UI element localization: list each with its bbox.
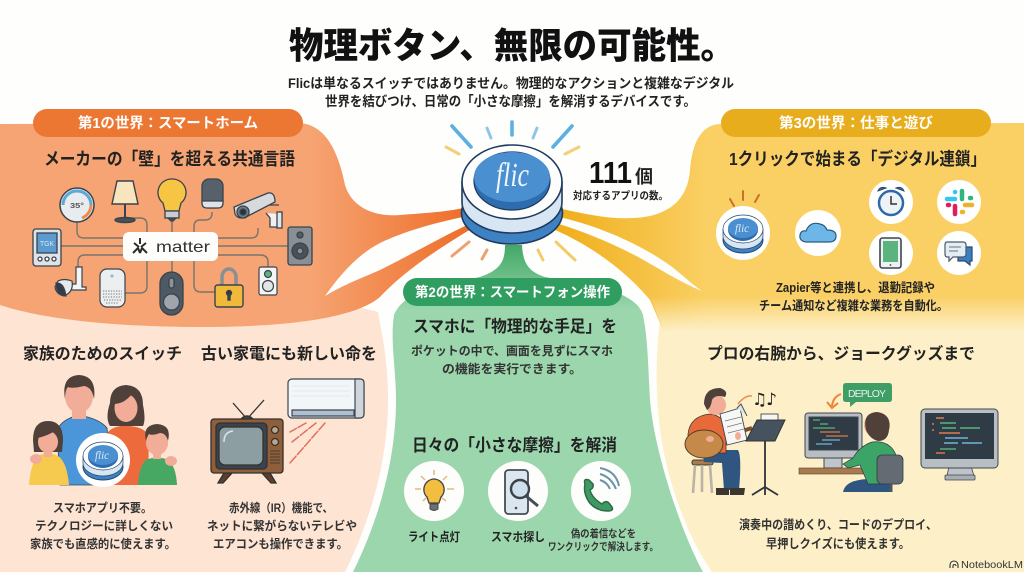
text: infrared <box>207 500 357 551</box>
mother's hand on boy <box>165 456 177 466</box>
stat: 111 apps: 111 <box>589 155 632 190</box>
text: family switch: スマホアプリ不要。 <box>53 501 152 515</box>
heading: physical limbs: スマホに「物理的な手足」を <box>413 316 617 336</box>
text: fake call: 偽の着信などを <box>571 527 636 540</box>
intro text <box>288 75 734 109</box>
panel: family and old appliances (peach) <box>0 298 388 572</box>
pill: world 1 <box>33 109 303 137</box>
title: 物理ボタン、無限の可能性。 <box>289 25 735 66</box>
illustration: large monitor <box>921 409 998 480</box>
thermostat <box>60 188 94 222</box>
connector lines <box>61 212 288 293</box>
rays around button <box>446 122 579 260</box>
lamp <box>112 181 138 222</box>
boy <box>138 424 177 485</box>
icon: phone call <box>571 461 631 521</box>
text: infrared: 赤外線（IR）機能で、 <box>229 500 333 515</box>
music stand <box>746 414 785 495</box>
text: zapier: チーム通知など複雑な業務を自動化。 <box>759 298 948 313</box>
text: zapier: Zapier等と連携し、退勤記録や <box>776 280 935 295</box>
intro text: 世界を結びつけ、日常の「小さな摩擦」を解消するデバイスです。 <box>325 93 696 109</box>
text: family switch <box>30 501 176 551</box>
orange arrow <box>827 394 841 408</box>
heading: family switch: 家族のためのスイッチ <box>23 344 182 363</box>
text: pro usage <box>739 517 937 551</box>
pill: world 3 <box>721 109 991 137</box>
diagram: matter network <box>33 179 312 315</box>
panel: smartphone (green) <box>353 245 703 572</box>
padlock <box>215 269 243 307</box>
stat: 111 apps: 対応するアプリの数。 <box>573 189 668 202</box>
sheet music <box>720 404 747 445</box>
text: fake call: ワンクリックで解決します。 <box>548 540 658 553</box>
panel: smart home (orange) <box>0 123 471 327</box>
text: infrared: エアコンも操作できます。 <box>213 536 348 551</box>
flic badge <box>76 433 130 487</box>
text: light: ライト点灯 <box>408 529 460 544</box>
central flic button <box>462 145 562 244</box>
text: in pocket: の機能を実行できます。 <box>442 361 582 376</box>
pill: world 2: 第2の世界：スマートフォン操作 <box>415 284 610 300</box>
flic badge: flic <box>95 448 110 462</box>
illustration: family with button <box>29 375 177 487</box>
developer <box>843 412 903 492</box>
icon: small flic button: flic <box>735 221 750 235</box>
light bulb <box>158 179 186 221</box>
text: fake call <box>548 527 658 553</box>
pill: world 3: 第3の世界：仕事と遊び <box>779 114 933 132</box>
wall tablet <box>33 229 61 266</box>
deploy bubble: DEPLOY <box>848 388 886 400</box>
doorbell <box>259 267 277 295</box>
monitor code <box>813 420 848 444</box>
stat: 111 apps <box>573 155 668 202</box>
icon: tablet <box>869 231 913 275</box>
panel: work and play lower (cream base) <box>657 296 1024 572</box>
icon: cloud <box>795 210 841 256</box>
stool <box>692 460 713 493</box>
pill: world 2 <box>403 278 622 306</box>
screen code <box>932 418 982 453</box>
heading: digital chain: 1クリックで始まる「デジタル連鎖」 <box>729 149 986 169</box>
stat: 111 apps: 個 <box>635 167 653 187</box>
yellow to cream fade <box>650 296 1024 332</box>
logo: NotebookLM: NotebookLM <box>961 559 1023 571</box>
pill: world 1: 第1の世界：スマートホーム <box>78 114 258 132</box>
guitar <box>685 428 752 458</box>
heading: pro to joke: プロの右腕から、ジョークグッズまで <box>707 344 975 363</box>
intro text: Flicは単なるスイッチではありません。物理的なアクションと複雑なデジタル <box>288 75 734 91</box>
heading: small friction: 日々の「小さな摩擦」を解消 <box>412 436 617 455</box>
icon: small flic button <box>716 191 770 260</box>
torso <box>688 414 726 453</box>
air purifier <box>100 269 125 307</box>
smart button <box>160 272 183 315</box>
father's hand on girl <box>30 454 42 464</box>
text: in pocket: ポケットの中で、画面を見ずにスマホ <box>411 343 613 358</box>
desk <box>799 468 869 474</box>
icon: alarm clock <box>869 180 913 224</box>
text: pro usage: 演奏中の譜めくり、コードのデプロイ、 <box>739 517 937 532</box>
thermostat: 35° <box>70 202 84 210</box>
text: pro usage: 早押しクイズにも使えます。 <box>766 536 910 551</box>
text: phone search: スマホ探し <box>491 530 545 544</box>
head <box>706 395 726 415</box>
smart speaker <box>202 179 223 208</box>
text: family switch: 家族でも直感的に使えます。 <box>30 536 176 551</box>
infrared rays <box>290 423 325 463</box>
monitor <box>805 413 862 468</box>
icon: light on <box>404 461 464 521</box>
mother <box>105 385 149 485</box>
text: zapier <box>759 280 948 313</box>
heading: old appliances: 古い家電にも新しい命を <box>201 345 377 363</box>
text: infrared: ネットに繋がらないテレビや <box>207 518 357 533</box>
illustration: developer deploying <box>799 383 903 492</box>
icon: phone search <box>488 461 548 521</box>
heading: common language: メーカーの「壁」を超える共通言語 <box>44 149 295 169</box>
speaker <box>288 227 312 265</box>
air conditioner <box>288 379 364 418</box>
illustration: guitarist <box>685 388 785 495</box>
music notes: ♫♪ <box>752 390 777 410</box>
wall tablet: TGK <box>40 241 54 248</box>
outdoor camera <box>55 267 86 296</box>
matter hub label <box>123 232 218 261</box>
icon: slack <box>937 180 981 224</box>
matter hub label: matter <box>156 239 211 256</box>
text: in pocket <box>411 343 613 376</box>
central flic button: flic <box>496 157 529 194</box>
tv <box>211 400 283 483</box>
icon: chat <box>937 231 981 275</box>
illustration: TV and air conditioner <box>211 379 364 483</box>
security camera <box>234 193 282 228</box>
panel: work and play (yellow) <box>553 123 1024 332</box>
father <box>57 375 112 485</box>
girl <box>29 421 69 485</box>
text: family switch: テクノロジーに詳しくない <box>35 518 173 533</box>
legs <box>702 450 740 490</box>
